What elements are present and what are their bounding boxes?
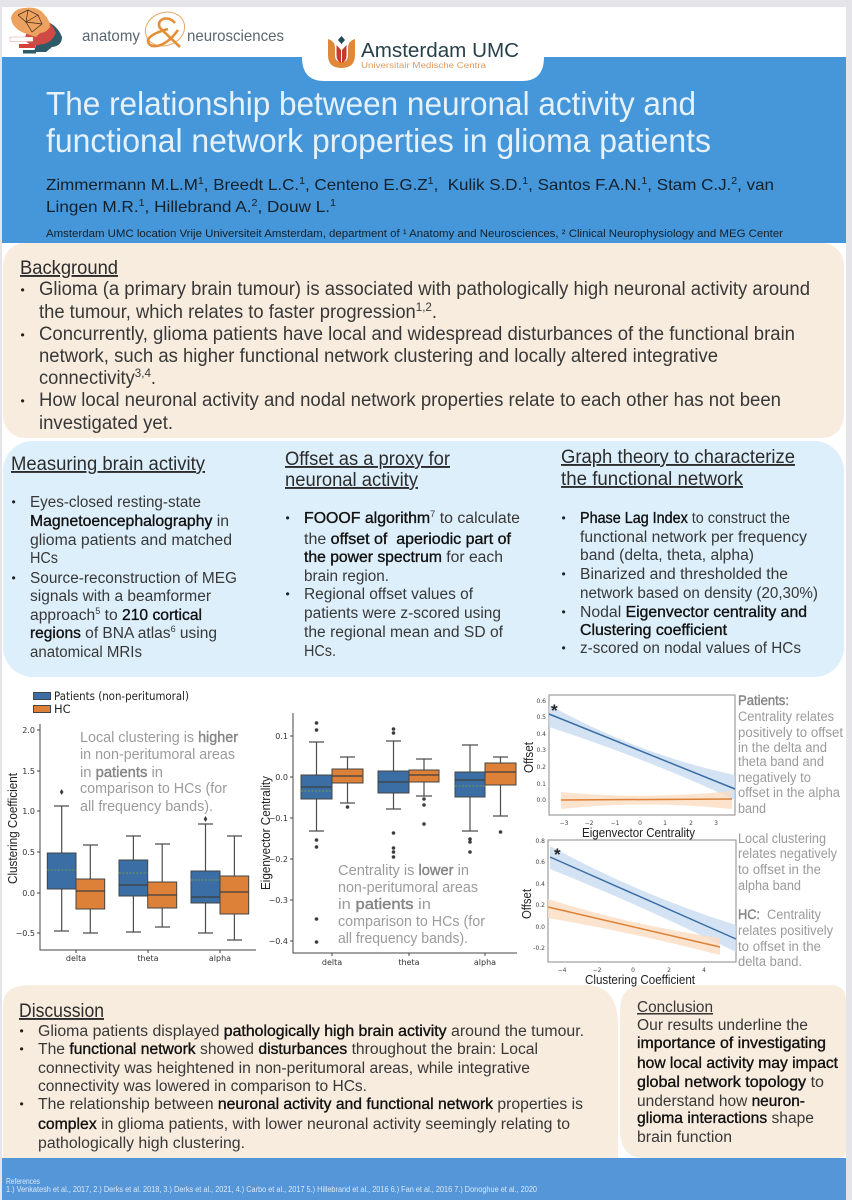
y axis tick labels: 0.0 — [22, 889, 35, 898]
y axis tick labels — [16, 726, 35, 938]
confidence bands — [548, 846, 736, 955]
text block: discussion bullets: • — [20, 1042, 24, 1056]
tick labels: −4 — [558, 967, 567, 974]
alpha boxes — [455, 745, 516, 854]
y axis tick labels: −0.1 — [269, 814, 288, 823]
authors: 1 — [330, 198, 336, 209]
heading: graph theory to characterize the functional network: the functional network — [561, 469, 743, 490]
text block: measuring bullets: Eyes-closed resting-state — [30, 494, 201, 511]
annotation: local clustering higher: comparison to HCs (for — [80, 780, 227, 797]
text block: offset bullets: • — [286, 511, 290, 525]
significance star: * — [551, 701, 558, 720]
y axis title: Clustering Coefficient — [6, 773, 20, 884]
annotation: patients and HC relations: alpha band — [738, 878, 801, 893]
delta boxes — [301, 721, 363, 944]
text block: background bullets: • — [20, 328, 25, 342]
authors: , Santos F.A.N. — [528, 177, 641, 194]
text block: conclusion: Our results underline the — [637, 1017, 808, 1034]
text block: measuring bullets: regions of BNA atlas — [30, 625, 170, 642]
text block: discussion bullets: complex in glioma patients, with lower neuronal activity seemingly relating to — [38, 1116, 570, 1133]
title: The relationship between neuronal activity and — [46, 85, 696, 122]
regression lines — [548, 857, 736, 947]
authors: 1 — [428, 176, 434, 187]
text block: conclusion: understand how neuron- — [637, 1093, 805, 1110]
text block: graph theory bullets: functional network per frequency — [580, 529, 807, 546]
regression lines — [549, 714, 735, 800]
chart: clustering coefficient box plot — [6, 724, 256, 963]
annotation: local clustering higher: all frequency bands). — [80, 798, 213, 815]
text block: measuring bullets: 210 cortical — [122, 607, 202, 624]
tick labels: 0.0 — [536, 797, 546, 804]
annotation: local clustering higher: in patients in — [80, 764, 163, 781]
header band — [2, 36, 846, 243]
annotation: local clustering higher — [80, 729, 238, 815]
heading: graph theory to characterize the functional network — [561, 447, 795, 490]
annotation: patients and HC relations: HC: Centrality — [738, 907, 821, 922]
authors: , Centeno E.G.Z — [305, 177, 428, 194]
panel: methods — [3, 441, 844, 677]
text block: graph theory bullets: network based on density (20,30%) — [580, 585, 818, 602]
column: offset as a proxy — [285, 449, 520, 660]
annotation: patients and HC relations: relates negatively — [738, 846, 837, 861]
tick labels — [533, 838, 706, 974]
authors: 1 — [522, 176, 529, 187]
references — [6, 1177, 538, 1194]
y axis tick labels: −0.3 — [269, 896, 288, 905]
authors: , Stam C.J. — [647, 177, 731, 194]
x axis labels: alpha — [209, 954, 231, 963]
heading: offset as a proxy for neuronal activity: neuronal activity — [285, 470, 418, 491]
text block: measuring bullets: HCs — [30, 550, 58, 567]
text block: conclusion: global network topology to — [637, 1074, 824, 1091]
text block: offset bullets: 7 — [430, 509, 435, 519]
logo text: anatomy and neurosciences: anatomy — [82, 28, 140, 45]
tick labels: 3 — [714, 820, 718, 827]
text block: graph theory bullets: band (delta, theta, alpha) — [580, 547, 754, 564]
authors: , Douw L. — [257, 199, 330, 216]
text block: offset bullets: HCs. — [304, 643, 336, 660]
text block: graph theory bullets: • — [562, 567, 566, 581]
annotation: centrality lower: in patients in — [338, 896, 431, 913]
x axis labels: theta — [137, 954, 159, 963]
heading: measuring brain activity: Measuring brain activity — [11, 454, 205, 475]
tick labels: 0.3 — [536, 747, 546, 754]
authors: 1 — [198, 176, 204, 187]
panel: conclusion — [620, 985, 846, 1158]
authors: , Hillebrand A. — [145, 199, 251, 216]
text block: measuring bullets: 5 — [95, 606, 100, 616]
heading: discussion: Discussion — [19, 1001, 104, 1022]
legend: Patients (non-peritumoral) — [54, 689, 189, 703]
annotation: patients and HC relations — [738, 693, 843, 969]
text block: graph theory bullets: • — [562, 605, 566, 619]
annotation: local clustering higher: in non-peritumoral areas — [80, 746, 235, 763]
authors: 1 — [139, 198, 145, 209]
annotation: centrality lower: non-peritumoral areas — [338, 879, 478, 896]
text block: measuring bullets: anatomical MRIs — [30, 644, 142, 661]
tick labels: −2 — [593, 967, 602, 974]
logo text: anatomy and neurosciences — [82, 7, 284, 51]
chart: eigenvector centrality box plot — [259, 713, 517, 967]
authors: , Kulik S.D. — [434, 177, 522, 194]
text block: background bullets: investigated yet. — [39, 413, 173, 434]
text block: measuring bullets: • — [12, 571, 16, 585]
x axis title: Clustering Coefficient — [585, 973, 695, 987]
authors: 1 — [641, 176, 648, 187]
y axis title: Eigenvector Centrality — [259, 775, 273, 890]
text block: discussion bullets: • — [20, 1024, 24, 1038]
text block: graph theory bullets: Nodal Eigenvector centrality and — [580, 604, 807, 621]
text block: background bullets: • — [20, 283, 25, 297]
text block: graph theory bullets: Clustering coefficient — [580, 622, 728, 639]
text block: graph theory bullets: • — [562, 641, 566, 655]
tick labels: 0.0 — [535, 924, 545, 931]
tick labels: 0.1 — [536, 781, 546, 788]
references: 1.) Venkatesh et al., 2017, 2.) Derks et al. 2018, 3.) Derks et al., 2021, 4.) Carbo et al., 2017 5.) Hillebrand et al., 2016 6.) Fan et al., 2016 7.) Donoghue et al., 2020 — [6, 1185, 538, 1194]
chart: offset vs clustering coefficient — [520, 838, 736, 987]
tick labels: 4 — [702, 967, 706, 974]
text block: offset bullets: patients were z-scored using — [304, 605, 501, 622]
annotation: centrality lower: comparison to HCs (for — [338, 913, 485, 930]
tick labels: 2 — [667, 967, 671, 974]
y axis title: Offset — [520, 889, 534, 919]
text block: graph theory bullets: • — [562, 511, 566, 525]
panel: discussion — [3, 985, 618, 1158]
text block: offset bullets: • — [286, 587, 290, 601]
annotation: patients and HC relations: to offset in the — [738, 862, 821, 877]
annotation: patients and HC relations: Centrality relates — [738, 709, 834, 724]
text block: offset bullets — [286, 509, 520, 660]
icon: brain network lab logo — [10, 8, 62, 54]
legend: HC — [54, 702, 71, 716]
text block: graph theory bullets — [562, 510, 818, 657]
references: References — [6, 1177, 40, 1186]
annotation: centrality lower: all frequency bands). — [338, 930, 468, 947]
y axis tick labels: 0.1 — [275, 732, 288, 741]
tick labels: 0 — [631, 967, 635, 974]
text block: background bullets: How local neuronal activity and nodal network properties relate to each other has not been — [39, 390, 781, 411]
significance star: * — [554, 845, 561, 864]
text block: background bullets: connectivity — [39, 368, 138, 389]
authors: 2 — [731, 176, 738, 187]
y axis tick labels: 0.0 — [275, 773, 288, 782]
x axis labels: theta — [398, 958, 420, 967]
text block: background bullets: Concurrently, glioma patients have local and widespread disturbances of the functional brain — [39, 324, 795, 345]
text block: measuring bullets: Source-reconstruction of MEG — [30, 570, 237, 587]
text block: offset bullets: the regional mean and SD of — [304, 624, 504, 641]
x axis labels: alpha — [474, 958, 496, 967]
affiliation: Amsterdam UMC location Vrije Universiteit Amsterdam, department of ¹ Anatomy and Neurosciences, ² Clinical Neurophysiology and MEG Center — [46, 228, 783, 240]
text block: background bullets: network, such as higher functional network clustering and locally altered integrative — [39, 346, 718, 367]
tick labels: −1 — [611, 820, 620, 827]
title — [46, 85, 711, 159]
annotation: centrality lower — [338, 862, 485, 947]
text block: offset bullets: brain region. — [304, 568, 389, 585]
annotation: patients and HC relations: to offset in the — [738, 939, 821, 954]
text block: conclusion: importance of investigating — [637, 1035, 826, 1052]
heading: offset as a proxy for neuronal activity: Offset as a proxy for — [285, 449, 451, 470]
text block: measuring bullets: signals with a beamformer — [30, 588, 211, 605]
text block: offset bullets: the power spectrum for each — [304, 549, 503, 566]
tick labels: 0.2 — [535, 902, 545, 909]
logo bar — [10, 7, 284, 53]
text block: conclusion: how local activity may impact — [637, 1055, 839, 1072]
title: functional network properties in glioma patients — [46, 122, 711, 159]
text block: conclusion: glioma interactions shape — [637, 1110, 814, 1127]
panel: background — [3, 243, 844, 438]
authors: 2 — [251, 198, 258, 209]
annotation: patients and HC relations: theta band and — [738, 754, 824, 769]
text block: background bullets: 3,4 — [135, 366, 151, 380]
annotation: centrality lower: Centrality is lower in — [338, 862, 469, 879]
text block: conclusion: brain function — [637, 1129, 732, 1146]
y axis tick labels: −0.2 — [269, 855, 288, 864]
text block: discussion bullets: The functional network showed disturbances throughout the brain: Local — [38, 1041, 538, 1058]
tick labels: −2 — [585, 820, 594, 827]
y axis tick labels: −0.5 — [16, 929, 35, 938]
x axis labels: delta — [66, 954, 86, 963]
text block: discussion bullets: Glioma patients displayed pathologically high brain activity around the tumour. — [38, 1023, 584, 1040]
theta boxes — [119, 836, 177, 932]
text block: graph theory bullets: Phase Lag Index to construct the — [580, 510, 790, 527]
logo text: anatomy and neurosciences: neurosciences — [187, 28, 284, 45]
annotation: local clustering higher: Local clustering is higher — [80, 729, 238, 746]
text block: measuring bullets: using — [176, 625, 217, 642]
heading: offset as a proxy for neuronal activity — [285, 449, 451, 491]
text block: measuring bullets: approach — [30, 607, 95, 624]
tick labels: 0.4 — [535, 881, 545, 888]
icon: tulip — [328, 36, 355, 68]
column: graph theory — [561, 447, 818, 657]
text block: measuring bullets: • — [12, 495, 16, 509]
tick labels: 0.2 — [536, 764, 546, 771]
text block: discussion bullets: The relationship between neuronal activity and functional network properties is — [38, 1096, 583, 1113]
column: measuring brain activity — [11, 454, 237, 661]
tick labels: -0.2 — [533, 945, 545, 952]
y axis tick labels: 2.0 — [22, 726, 35, 735]
theta boxes — [378, 727, 439, 859]
heading: graph theory to characterize the functional network: Graph theory to characterize — [561, 447, 795, 468]
x axis title: Eigenvector Centrality — [582, 826, 696, 840]
y axis tick labels — [269, 732, 288, 946]
text block: discussion bullets: connectivity was lowered in comparison to HCs. — [38, 1078, 367, 1095]
annotation: patients and HC relations: negatively to — [738, 770, 811, 785]
annotation: patients and HC relations: Local clustering — [738, 831, 826, 846]
text block: discussion bullets: connectivity was heightened in non-peritumoral areas, while integrative — [38, 1060, 530, 1077]
heading: conclusion: Conclusion — [637, 999, 713, 1016]
text block: background bullets: the tumour, which relates to faster progression — [39, 302, 429, 323]
confidence bands — [549, 705, 735, 809]
text block: graph theory bullets: Binarized and thresholded the — [580, 566, 788, 583]
tick labels: −3 — [560, 820, 569, 827]
text block: background bullets: Glioma (a primary brain tumour) is associated with pathologically high neuronal activity around — [39, 279, 810, 300]
text block: offset bullets: to calculate — [435, 510, 520, 527]
heading: background: Background — [20, 258, 118, 279]
authors: 1 — [299, 176, 305, 187]
authors: Lingen M.R. — [46, 199, 132, 216]
tick labels: 0.6 — [536, 698, 546, 705]
Amsterdam UMC logo tab — [302, 36, 544, 81]
annotation: patients and HC relations: Patients: — [738, 693, 789, 708]
x axis labels: delta — [322, 958, 342, 967]
x axis labels — [322, 958, 496, 967]
chart: offset vs eigenvector centrality — [522, 695, 735, 840]
text block: offset bullets: Regional offset values of — [304, 586, 474, 603]
text block: graph theory bullets: z-scored on nodal values of HCs — [580, 640, 801, 657]
text block: discussion bullets — [20, 1023, 584, 1152]
y axis tick labels: −0.4 — [269, 937, 288, 946]
y axis tick labels: 0.5 — [22, 848, 35, 857]
text block: measuring bullets: Magnetoencephalography in — [30, 513, 229, 530]
text block: conclusion — [637, 1017, 839, 1146]
text block: measuring bullets: glioma patients and matched — [30, 532, 232, 549]
x axis labels — [66, 954, 231, 963]
alpha boxes — [191, 816, 249, 940]
tick labels: 2 — [689, 820, 693, 827]
text block: background bullets: • — [20, 394, 25, 408]
tick labels: 0 — [638, 820, 642, 827]
text block: measuring bullets: to — [100, 607, 122, 624]
annotation: patients and HC relations: positively to offset — [738, 725, 843, 740]
legend — [34, 689, 189, 716]
text block: discussion bullets: pathologically high clustering. — [38, 1135, 245, 1152]
tick labels: 0.5 — [536, 714, 546, 721]
authors: Zimmermann M.L.M — [46, 177, 189, 194]
tick labels: 0.8 — [535, 838, 545, 845]
text block: background bullets — [20, 279, 810, 434]
y axis tick labels: 1.0 — [22, 807, 35, 816]
text block: offset bullets: the offset of aperiodic part of — [304, 531, 512, 548]
annotation: patients and HC relations: band — [738, 801, 766, 816]
Amsterdam UMC logo tab: Amsterdam UMC — [361, 40, 519, 62]
delta boxes — [47, 789, 105, 933]
tick labels: 0.6 — [535, 859, 545, 866]
text block: background bullets: . — [151, 368, 156, 389]
text block: background bullets: . — [432, 302, 437, 323]
footer band — [2, 1158, 846, 1200]
icon: ampersand — [141, 7, 189, 51]
y axis tick labels: 1.5 — [22, 767, 35, 776]
text block: measuring bullets — [12, 494, 237, 661]
tick labels: 1 — [663, 820, 667, 827]
authors — [46, 176, 774, 216]
annotation: patients and HC relations: in the delta and — [738, 740, 827, 755]
tick labels: 0.4 — [536, 731, 546, 738]
annotation: patients and HC relations: offset in the alpha — [738, 785, 840, 800]
annotation: patients and HC relations: relates positively — [738, 923, 833, 938]
text block: discussion bullets: • — [20, 1097, 24, 1111]
authors: , van — [737, 177, 774, 194]
authors: , Breedt L.C. — [204, 177, 299, 194]
y axis title: Offset — [522, 742, 536, 773]
tick labels — [536, 698, 718, 827]
Amsterdam UMC logo tab: Universitair Medische Centra — [361, 61, 487, 70]
text block: offset bullets: FOOOF algorithm — [304, 510, 430, 527]
text block: background bullets: 1,2 — [416, 300, 432, 314]
annotation: patients and HC relations: delta band. — [738, 954, 802, 969]
text block: measuring bullets: 6 — [171, 624, 176, 634]
